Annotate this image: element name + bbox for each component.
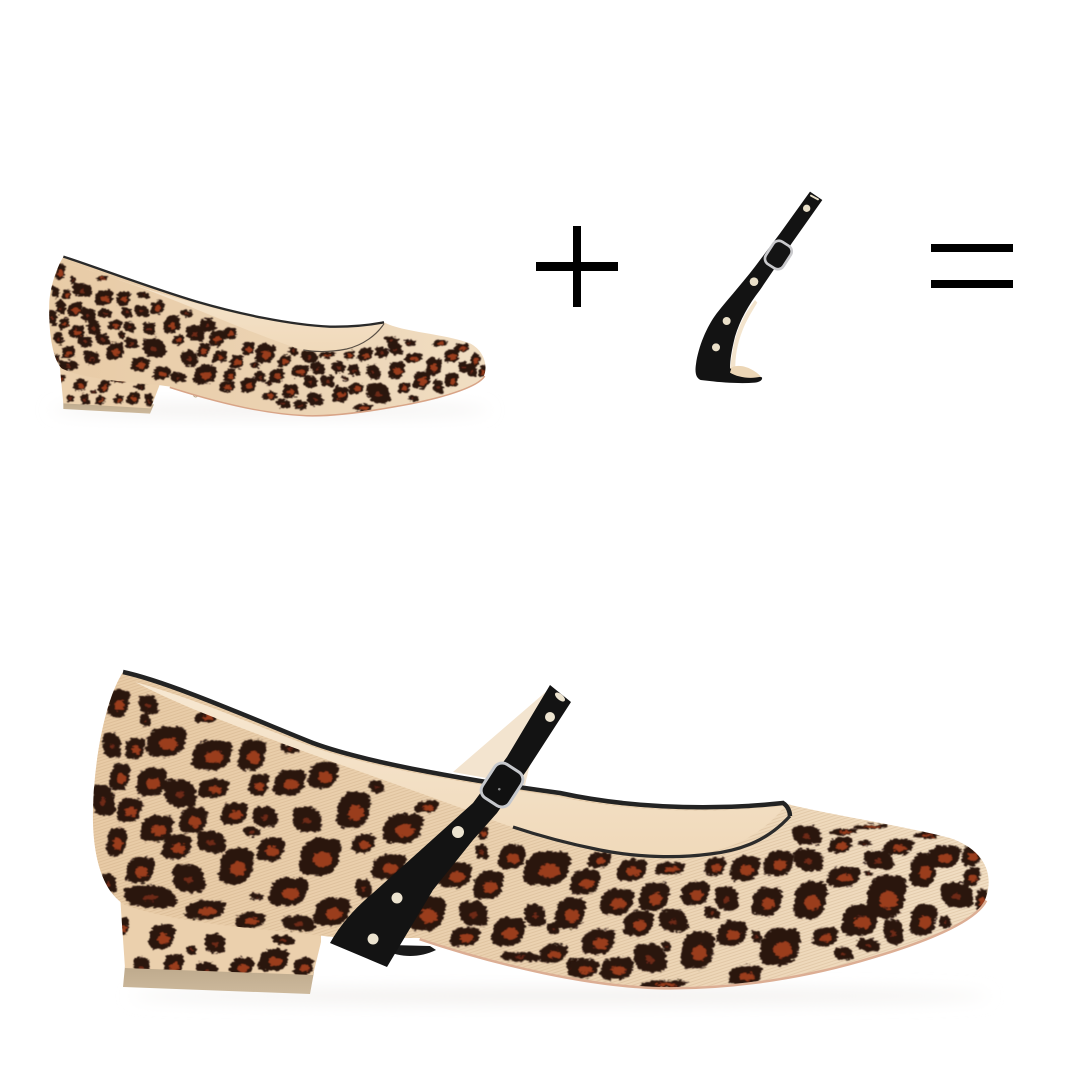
shoe interior lining xyxy=(135,682,785,856)
black strap with studs and buckle xyxy=(330,685,571,967)
icon: equals sign xyxy=(931,244,1013,288)
far-side lining behind strap xyxy=(453,690,548,785)
small leopard flat shoe xyxy=(48,257,490,416)
strap back tab under shoe xyxy=(385,945,436,956)
black studded strap xyxy=(696,192,822,383)
shoe upper with leopard print xyxy=(92,672,989,988)
shoe heel block xyxy=(118,895,321,994)
strap studs xyxy=(368,691,567,944)
shoe top binding xyxy=(123,672,790,857)
large leopard shoe with strap attached xyxy=(92,672,990,1004)
strap buckle xyxy=(478,760,526,810)
shoe sole edge xyxy=(420,900,985,987)
infographic: shoe plus strap equals strapped shoe xyxy=(49,192,1013,1004)
icon: plus sign xyxy=(536,226,618,307)
